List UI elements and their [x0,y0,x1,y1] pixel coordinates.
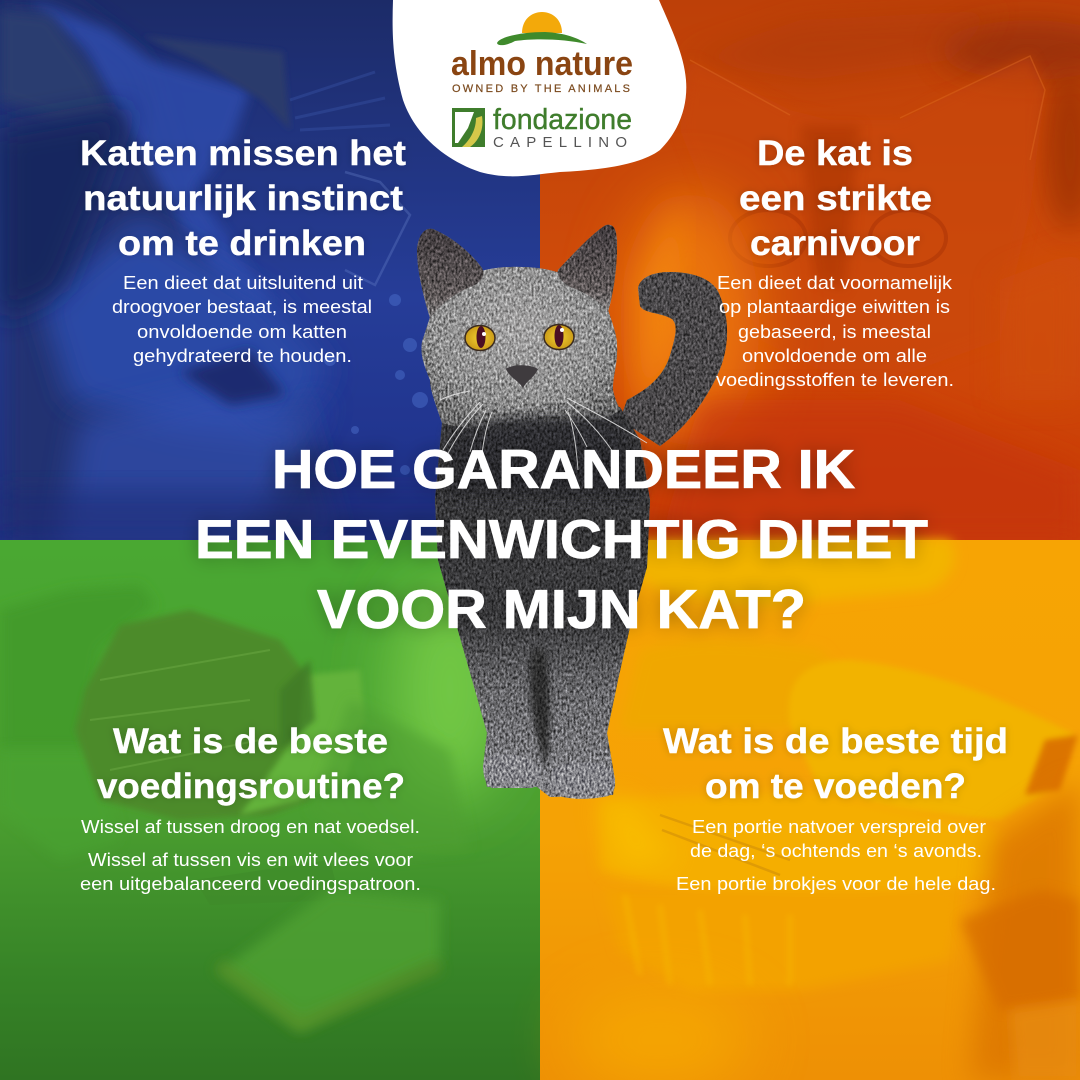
heading: yellow panel: Wat is de beste tijd [663,722,1008,761]
body: blue panel: Een dieet dat uitsluitend uit [123,272,363,293]
heading: green panel: Wat is de beste [113,722,388,761]
heading: orange panel: De kat is [757,134,913,173]
heading: green panel: voedingsroutine? [97,767,405,806]
title: VOOR MIJN KAT? [317,578,806,640]
cat eye right [544,324,574,350]
body: orange panel: gebaseerd, is meestal [738,321,931,342]
logo: fondazione: fondazione [493,104,632,136]
text block: orange panel [716,134,954,390]
panel: orange quadrant background [540,0,1080,540]
heading: green panel [97,722,405,806]
cat nose [506,365,538,388]
heading: blue panel: Katten missen het [80,134,406,173]
body: green panel: Wissel af tussen vis en wit vlees voor [88,849,413,870]
heading: blue panel [80,134,406,263]
body: blue panel: droogvoer bestaat, is meestal [112,296,372,317]
body: orange panel: onvoldoende om alle [742,345,927,366]
logo: almo nature wordmark: almo nature [451,45,633,83]
heading: blue panel: natuurlijk instinct [83,179,403,218]
title: EEN EVENWICHTIG DIEET [195,508,928,570]
heading: orange panel [739,134,932,263]
body: yellow panel: de dag, ‘s ochtends en ‘s avonds. [690,840,982,861]
logo: almo nature sun [522,12,562,33]
body: green panel: een uitgebalanceerd voedingspatroon. [80,873,421,894]
body: yellow panel: Een portie brokjes voor de hele dag. [676,873,996,894]
logo blob [393,0,686,176]
panel: green quadrant background [0,540,540,1080]
title [195,438,928,640]
text block: green panel [80,722,421,894]
text block: yellow panel [663,722,1008,894]
logo: tagline: OWNED BY THE ANIMALS [452,83,630,95]
body: green panel [80,816,421,894]
body: orange panel [716,272,954,390]
logo: capellino: CAPELLINO [493,134,627,151]
body: blue panel: onvoldoende om katten [137,321,347,342]
title: HOE GARANDEER IK [272,438,855,500]
body: blue panel [112,272,372,366]
cat eye left [465,326,495,350]
body: orange panel: op plantaardige eiwitten is [719,296,950,317]
logo: almo nature swoosh [497,32,587,45]
heading: blue panel: om te drinken [118,224,366,263]
heading: yellow panel: om te voeden? [705,767,966,806]
text block: blue panel [80,134,406,366]
body: orange panel: voedingsstoffen te leveren. [716,369,954,390]
body: blue panel: gehydrateerd te houden. [133,345,352,366]
body: orange panel: Een dieet dat voornamelijk [717,272,953,293]
body: yellow panel [676,816,996,894]
cat fur: tail, body, head, ears [417,225,727,799]
panel: blue quadrant background [0,0,540,540]
cat whiskers [440,391,647,470]
icon: grey cat [417,225,727,799]
heading: orange panel: carnivoor [750,224,920,263]
icon: fondazione capellino [452,108,485,147]
heading: yellow panel [663,722,1008,806]
panel: yellow quadrant background [540,540,1080,1080]
body: green panel: Wissel af tussen droog en nat voedsel. [81,816,420,837]
heading: orange panel: een strikte [739,179,932,218]
body: yellow panel: Een portie natvoer verspreid over [692,816,986,837]
